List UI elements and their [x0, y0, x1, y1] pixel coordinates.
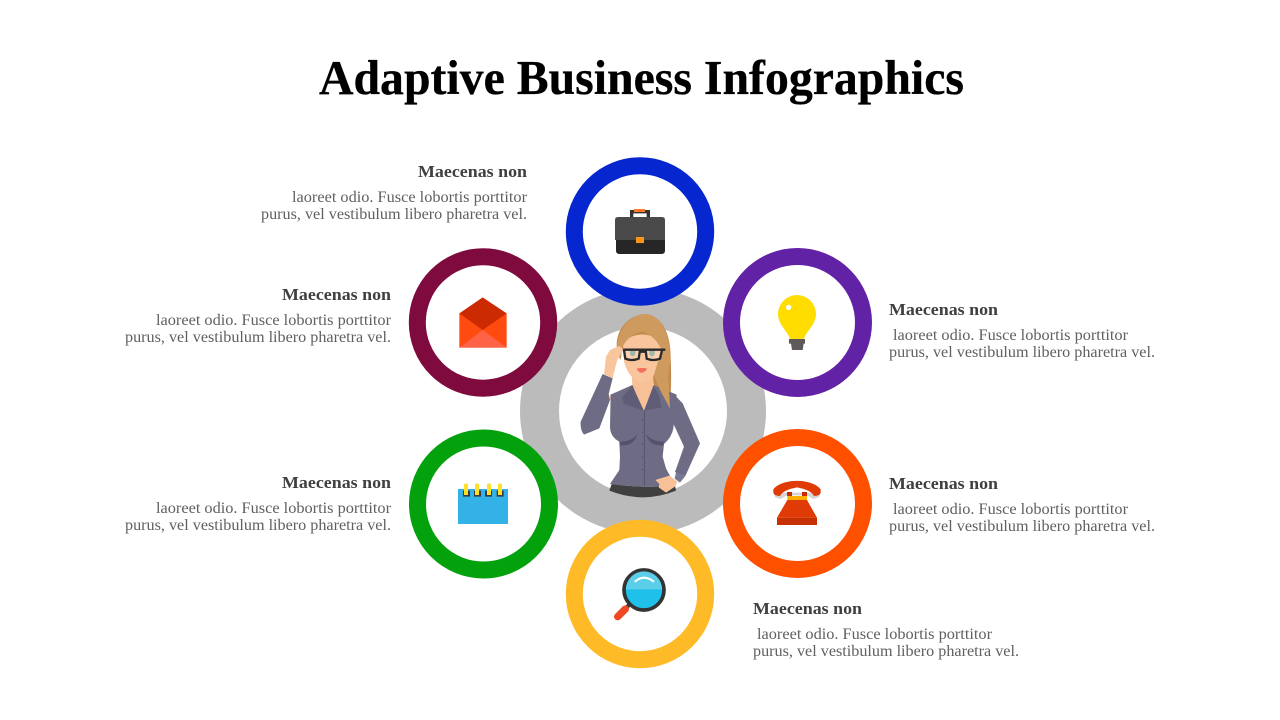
icon: magnifying glass	[618, 570, 664, 617]
eyes	[624, 351, 663, 360]
icon: light bulb	[778, 295, 816, 350]
bust shadows	[619, 434, 664, 445]
glasses	[621, 350, 665, 360]
text block: upper right	[889, 300, 1155, 361]
icon: envelope	[459, 297, 507, 348]
right arm sleeve	[672, 395, 700, 476]
face	[623, 335, 661, 383]
text block: bottom: Maecenas non	[753, 599, 862, 618]
text block: top left: purus, vel vestibulum libero pharetra vel.	[261, 206, 527, 223]
shoulder skin	[610, 387, 677, 400]
ring: green	[418, 438, 550, 570]
text block: lower right: Maecenas non	[889, 474, 998, 493]
text block: middle left: Maecenas non	[282, 285, 391, 304]
ring: orange	[732, 438, 864, 570]
text block: lower left: laoreet odio. Fusce lobortis porttitor	[156, 500, 392, 517]
title: Adaptive Business Infographics	[319, 50, 964, 105]
ring: blue	[574, 166, 706, 297]
text block: upper right: laoreet odio. Fusce lobortis porttitor	[893, 327, 1129, 344]
text block: lower right: laoreet odio. Fusce lobortis porttitor	[893, 501, 1129, 518]
icon: notepad	[458, 483, 508, 524]
shirt body	[610, 385, 677, 487]
shirt buttons	[641, 419, 644, 470]
skirt	[609, 484, 676, 497]
text block: lower right: purus, vel vestibulum libero pharetra vel.	[889, 518, 1155, 535]
text block: middle left: purus, vel vestibulum libero pharetra vel.	[125, 329, 391, 346]
text block: bottom: purus, vel vestibulum libero pharetra vel.	[753, 643, 1019, 660]
hair back	[617, 314, 671, 409]
icon: briefcase	[615, 209, 665, 254]
ring: maroon	[417, 257, 549, 388]
placket	[643, 411, 646, 486]
irises	[630, 349, 655, 356]
text block: bottom	[753, 599, 1019, 660]
text block: top left: laoreet odio. Fusce lobortis porttitor	[292, 189, 528, 206]
text block: top left	[261, 162, 528, 223]
text block: upper right: Maecenas non	[889, 300, 998, 319]
illustration: businesswoman adjusting glasses	[581, 314, 700, 497]
collar flaps	[622, 385, 662, 411]
text block: lower left	[125, 473, 392, 534]
hand on hip	[655, 476, 677, 493]
raised arm sleeve	[581, 374, 613, 435]
text block: top left: Maecenas non	[418, 162, 527, 181]
neck and open collar	[632, 372, 653, 411]
ring: yellow	[574, 528, 706, 660]
text block: middle left: laoreet odio. Fusce lobortis porttitor	[156, 312, 392, 329]
ring: purple	[732, 256, 864, 388]
text block: middle left	[125, 285, 392, 346]
cuff	[675, 472, 685, 483]
text block: lower left: purus, vel vestibulum libero pharetra vel.	[125, 517, 391, 534]
raised hand	[604, 346, 623, 378]
text block: upper right: purus, vel vestibulum libero pharetra vel.	[889, 344, 1155, 361]
lips	[637, 368, 647, 373]
central grey ring	[540, 308, 746, 514]
hair front	[617, 314, 671, 408]
text block: bottom: laoreet odio. Fusce lobortis porttitor	[757, 626, 993, 643]
text block: lower right	[889, 474, 1155, 535]
icon: telephone	[773, 481, 821, 525]
text block: lower left: Maecenas non	[282, 473, 391, 492]
